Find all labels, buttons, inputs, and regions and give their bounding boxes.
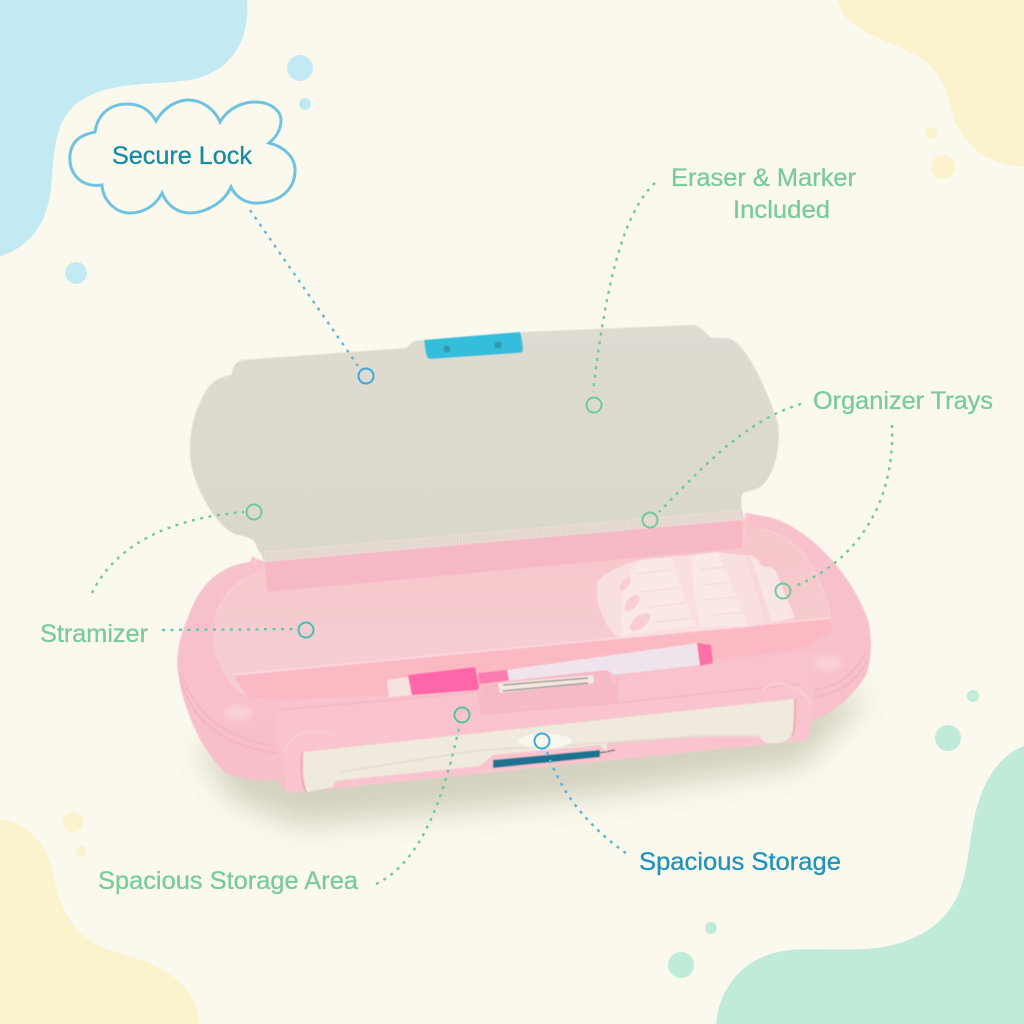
- tray columns: [621, 557, 695, 636]
- blob: bottom left yellow: [0, 819, 200, 1024]
- leader line: [376, 724, 460, 884]
- marker: [586, 398, 602, 412]
- label: Spacious Storage: [639, 848, 841, 876]
- label: Organizer Trays: [813, 387, 993, 415]
- lower pink band: [277, 685, 812, 793]
- blob: bottom right green: [716, 746, 1024, 1024]
- lower compartment wall: [233, 618, 832, 700]
- rim contour lines: [215, 530, 830, 634]
- sharpener block: [480, 670, 617, 714]
- leader line: [250, 210, 358, 366]
- corner highlights: [224, 705, 252, 721]
- marker: [358, 368, 374, 384]
- eraser: [387, 667, 480, 698]
- front rim panel: [273, 652, 817, 793]
- hinge strip: [260, 510, 745, 563]
- marker: [534, 734, 550, 748]
- leader line to lid: [92, 512, 244, 593]
- blob: top right yellow: [837, 0, 1024, 167]
- leader line to hinge: [659, 404, 801, 512]
- leader line to tray: [162, 629, 296, 630]
- callout: Stramizer: [40, 504, 314, 648]
- cloud shape: [70, 100, 295, 213]
- blob: top left blue: [0, 0, 247, 256]
- latch highlight: [518, 734, 572, 748]
- callout: Secure Lock: [70, 100, 373, 384]
- blue storage edge: [493, 750, 600, 768]
- sharpener slot: [498, 675, 594, 693]
- body outer shell: [177, 513, 871, 793]
- marker: [454, 708, 470, 722]
- tray slots: [617, 575, 633, 593]
- blue clip: [424, 332, 523, 359]
- marker: tray: [298, 622, 314, 638]
- shadow: [195, 695, 870, 825]
- label: Stramizer: [40, 620, 148, 648]
- latch bumps: [285, 684, 811, 752]
- organizer tray: [597, 552, 795, 638]
- body side contour lines: [180, 672, 277, 753]
- callout: Spacious Storage: [534, 734, 841, 876]
- marker: [478, 643, 713, 686]
- callout: Spacious Storage Area: [98, 708, 470, 895]
- callout: Organizer Trays: [642, 387, 993, 598]
- inner tray floor: [213, 520, 829, 700]
- back inner wall: [265, 520, 742, 592]
- pencil case product: [177, 325, 871, 825]
- cream latch strip: [303, 699, 794, 792]
- marker: tray: [776, 584, 790, 598]
- leader line: [547, 752, 630, 856]
- leader line: [593, 183, 655, 392]
- marker: hinge: [642, 512, 658, 528]
- callout: Eraser & Marker Included: Included: [733, 196, 830, 224]
- leader line to tray: [793, 425, 892, 587]
- label: Eraser & Marker: [671, 164, 856, 192]
- marker: lid: [246, 504, 262, 520]
- callout: Eraser & Marker Included: [586, 164, 856, 412]
- label: Spacious Storage Area: [98, 867, 358, 895]
- label: Secure Lock: [112, 142, 252, 170]
- lid: [190, 325, 779, 563]
